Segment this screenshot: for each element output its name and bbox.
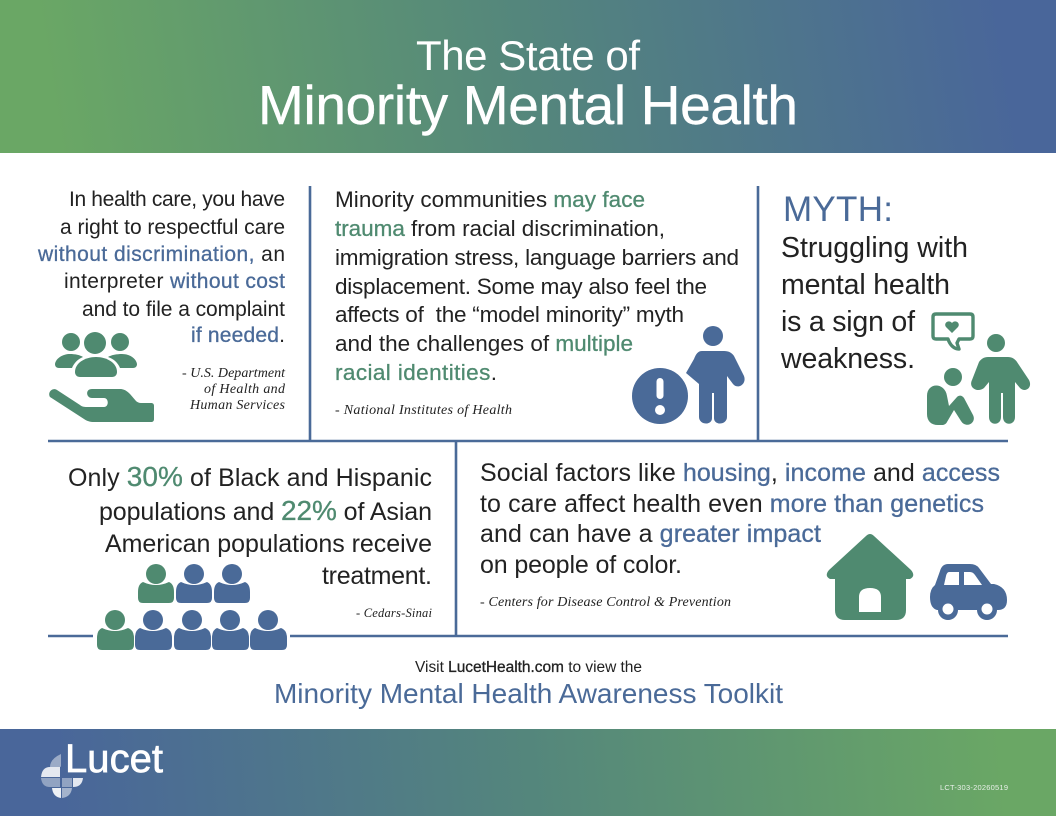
- icon: house: [827, 534, 913, 620]
- text block: treatment statistics: [68, 461, 432, 590]
- text block: trauma: Minority communities may face: [335, 187, 645, 212]
- citation: HHS: - U.S. Department: [182, 366, 286, 381]
- text block: trauma: racial identities.: [335, 360, 497, 385]
- text block: social factors: Social factors like housing, income and access: [480, 459, 1000, 487]
- myth statement: Struggling with: [781, 232, 968, 264]
- citation: Cedars-Sinai: - Cedars-Sinai: [356, 606, 433, 620]
- call to action: Visit LucetHealth.com to view the: [415, 659, 642, 676]
- call to action: Minority Mental Health Awareness Toolkit: [274, 678, 783, 709]
- icon: group in hand: [49, 332, 154, 422]
- document code: LCT-303-20260519: [940, 783, 1008, 792]
- text block: patient rights: if needed.: [191, 324, 285, 347]
- text block: social factors: and can have a greater impact: [480, 520, 821, 548]
- citation: HHS: Human Services: [189, 398, 286, 413]
- call to action: [274, 659, 783, 709]
- footer banner: [0, 729, 1056, 816]
- text block: patient rights: and to file a complaint: [82, 298, 285, 321]
- text block: treatment statistics: treatment.: [322, 562, 432, 590]
- logo: Lucet: Lucet: [65, 737, 163, 781]
- text block: treatment statistics: Only 30% of Black and Hispanic: [68, 461, 432, 492]
- text block: trauma: displacement. Some may also feel the: [335, 274, 707, 299]
- text block: patient rights: a right to respectful care: [60, 216, 285, 239]
- myth heading: MYTH:: [783, 190, 893, 229]
- text block: patient rights: without discrimination, an: [37, 243, 285, 266]
- header banner: [0, 0, 1056, 153]
- text block: treatment statistics: populations and 22% of Asian: [99, 495, 432, 526]
- title: [258, 32, 798, 136]
- myth statement: [780, 232, 968, 375]
- text block: social factors: to care affect health even more than genetics: [480, 490, 984, 518]
- text block: social factors: [480, 459, 1000, 579]
- text block: trauma: trauma from racial discrimination,: [335, 216, 665, 241]
- text block: trauma: immigration stress, language barriers and: [335, 245, 739, 270]
- citation: NIH: - National Institutes of Health: [335, 403, 512, 418]
- text block: trauma: [335, 187, 739, 385]
- myth statement: is a sign of: [781, 306, 915, 338]
- text block: trauma: and the challenges of multiple: [335, 331, 633, 356]
- icon: support conversation: [927, 314, 1030, 425]
- text block: social factors: on people of color.: [480, 551, 682, 579]
- logo: Lucet: [41, 737, 163, 798]
- icon: car: [930, 564, 1007, 620]
- text block: patient rights: interpreter without cost: [64, 270, 285, 293]
- icon: people row: [97, 564, 287, 650]
- myth statement: mental health: [781, 269, 950, 301]
- citation: HHS: [182, 366, 286, 413]
- text block: patient rights: In health care, you have: [69, 188, 285, 211]
- citation: CDC: - Centers for Disease Control & Prevention: [480, 595, 731, 610]
- title: The State of: [416, 32, 640, 79]
- myth statement: weakness.: [780, 343, 915, 375]
- text block: treatment statistics: American populations receive: [105, 530, 432, 558]
- text block: patient rights: [37, 188, 285, 347]
- title: Minority Mental Health: [258, 74, 798, 136]
- citation: HHS: of Health and: [204, 382, 286, 397]
- text block: trauma: affects of the “model minority” myth: [335, 302, 684, 327]
- icon: person with exclamation: [632, 326, 745, 424]
